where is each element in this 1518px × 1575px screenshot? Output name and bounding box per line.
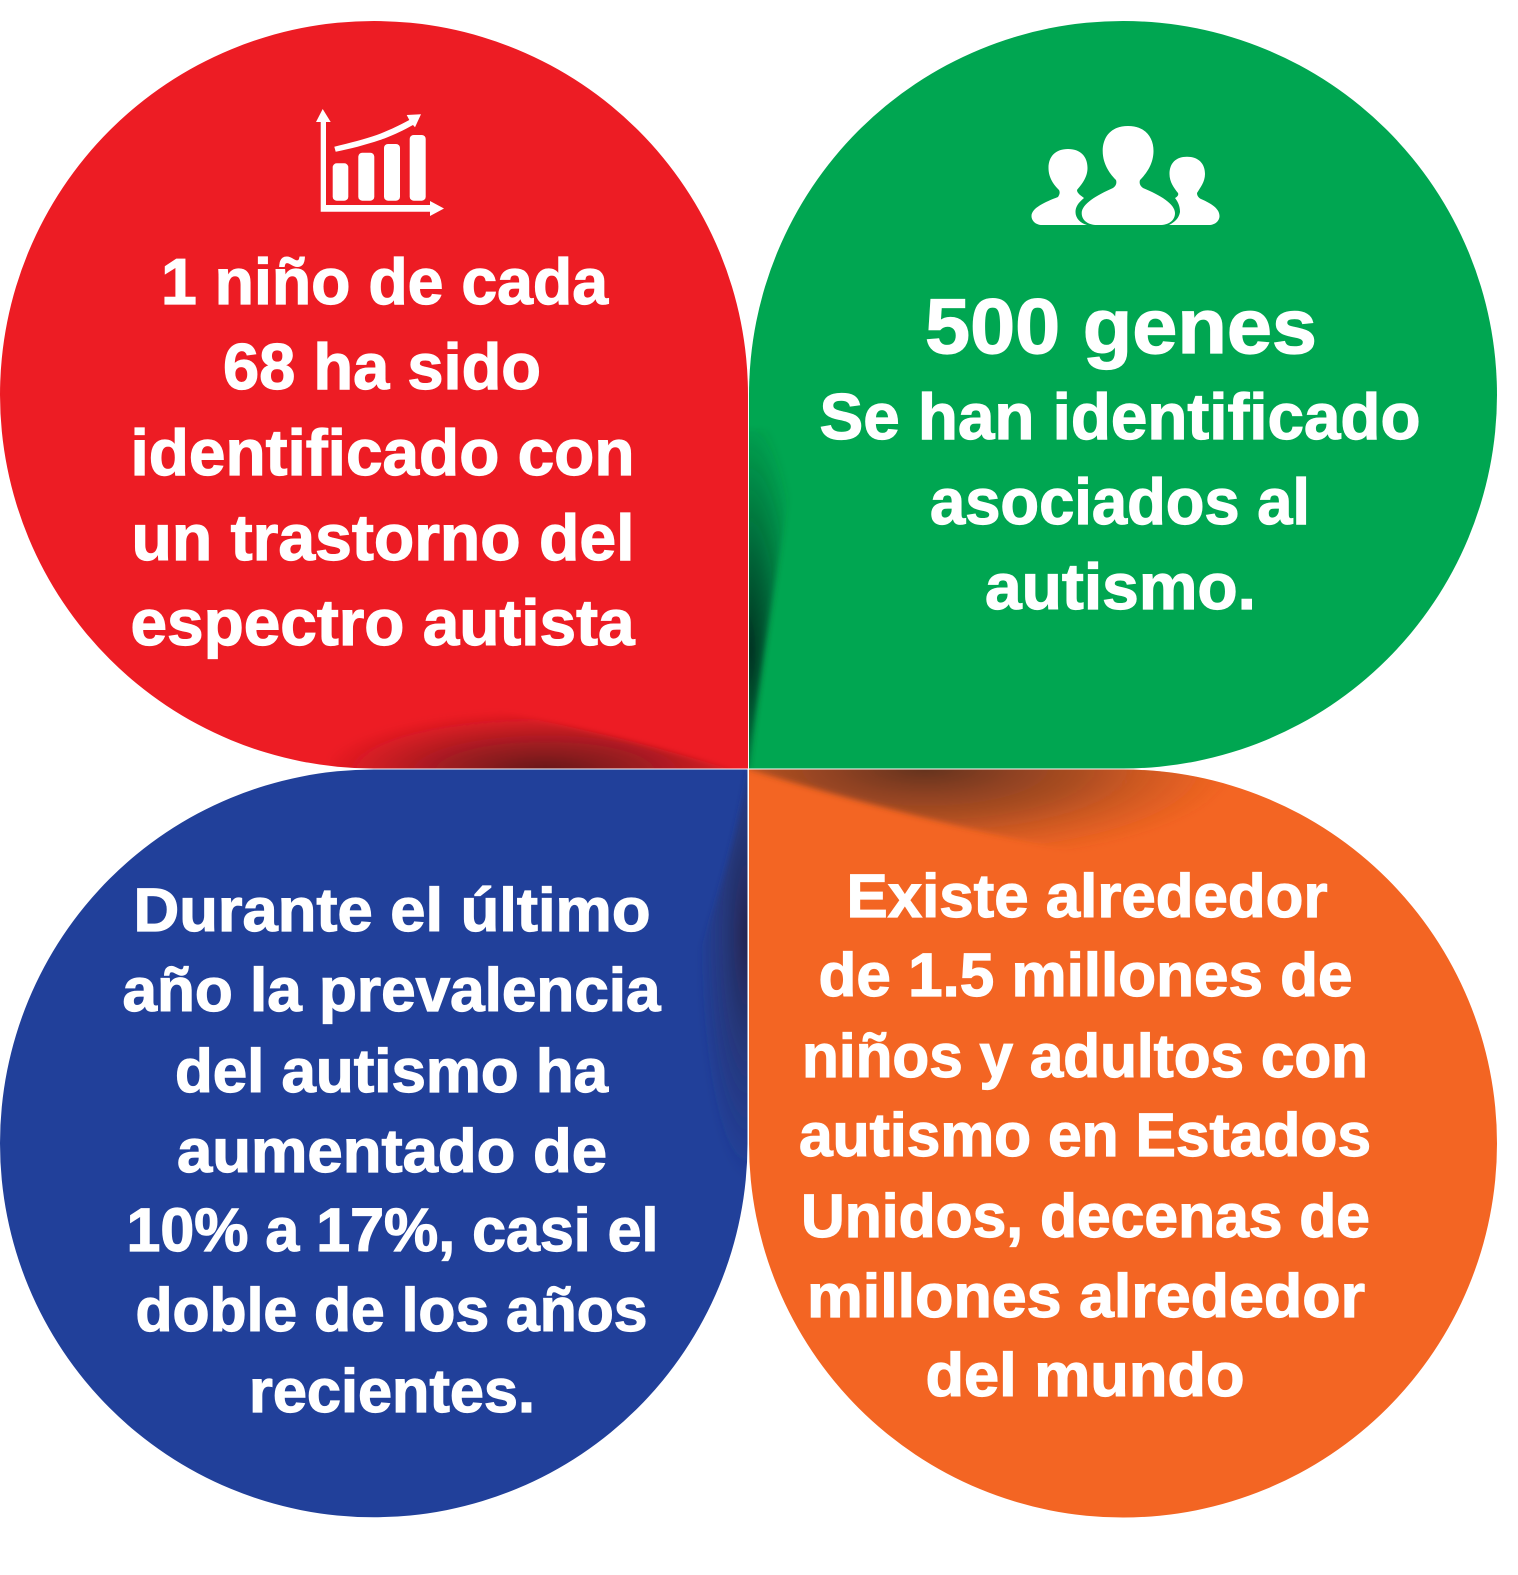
text block: 1 niño de cada 68: 1 niño de cada — [161, 245, 609, 318]
text block: prevalence: del autismo ha — [175, 1037, 609, 1105]
text block: genes description: Se han identificado — [820, 380, 1420, 453]
icon: group of three people — [1032, 126, 1220, 225]
text block: 1.5 million: autismo en Estados — [799, 1101, 1371, 1169]
text block: genes description: autismo. — [985, 550, 1256, 623]
text block: 1.5 million: de 1.5 millones de — [818, 941, 1352, 1009]
text block: 1 niño de cada 68: espectro autista — [130, 586, 635, 659]
text block: genes description: asociados al — [930, 465, 1310, 538]
text block: prevalence: aumentado de — [177, 1117, 607, 1185]
text block: prevalence — [122, 876, 662, 1425]
panel: red statistic — [0, 21, 748, 768]
text block: prevalence: recientes. — [249, 1357, 535, 1425]
text block: 1 niño de cada 68: 68 ha sido — [223, 330, 541, 403]
text block: prevalence: 10% a 17%, casi el — [126, 1196, 658, 1264]
text block: 1.5 million: Existe alrededor — [846, 862, 1328, 930]
text block: 1.5 million — [799, 862, 1371, 1409]
text block: prevalence: año la prevalencia — [122, 956, 662, 1024]
panel: blue statistic — [0, 770, 748, 1518]
text block: 1 niño de cada 68: un trastorno del — [132, 501, 634, 574]
text block: 1.5 million: del mundo — [926, 1341, 1244, 1409]
text block: genes description — [820, 380, 1420, 623]
panel: orange statistic — [749, 770, 1497, 1518]
text block: 1 niño de cada 68: identificado con — [130, 416, 634, 489]
panel: green statistic — [749, 21, 1497, 768]
icon: rising bar chart — [316, 109, 444, 216]
text block: 1 niño de cada 68 — [130, 245, 635, 659]
text block: 1.5 million: millones alrededor — [807, 1262, 1365, 1330]
heading: 500 genes: 500 genes — [925, 282, 1317, 370]
text block: prevalence: Durante el último — [134, 876, 650, 944]
text block: 1.5 million: Unidos, decenas de — [801, 1182, 1370, 1250]
text block: 1.5 million: niños y adultos con — [802, 1022, 1368, 1090]
text block: prevalence: doble de los años — [136, 1276, 648, 1344]
